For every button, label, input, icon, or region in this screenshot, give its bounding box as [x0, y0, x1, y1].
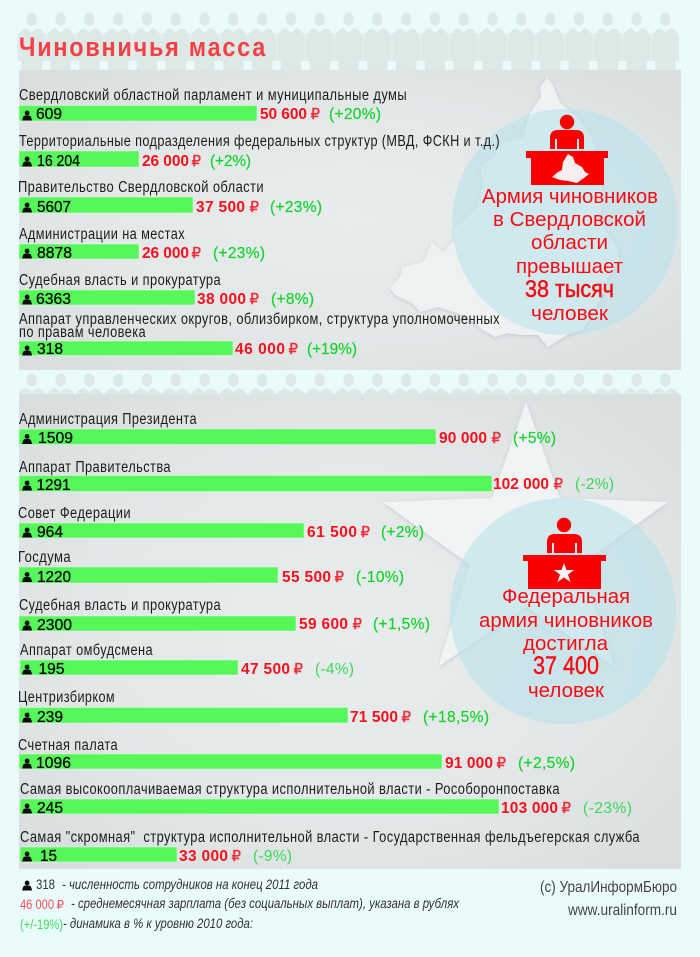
row: regional parliament: Свердловский областной парламент и муниципальные думы: [19, 87, 407, 104]
legend: [20, 876, 460, 932]
row: Accounts Chamber: [18, 737, 575, 772]
row: local administrations: ₽: [191, 244, 201, 262]
row: federal territorial divisions: Территориальные подразделения федеральных структур (МВД, ФСКН и т.д.): [19, 133, 500, 150]
callout text: regional: человек: [531, 303, 608, 325]
row: courts and prosecutors, federal: Судебная власть и прокуратура: [19, 597, 221, 614]
row: ombudsman apparatus: (-4%): [315, 661, 354, 678]
row: regional parliament: (+20%): [329, 106, 381, 123]
circle callout: regional: [452, 109, 678, 335]
row: Accounts Chamber: ₽: [496, 754, 506, 772]
row: Rosoboronpostavka: [20, 781, 632, 817]
row: Government Apparatus: (-2%): [575, 476, 614, 493]
row: Central Election Commission: [18, 689, 489, 726]
row: Central Election Commission: Центризбирком: [18, 689, 115, 706]
row: Government Apparatus: 1291: [36, 477, 70, 494]
callout text: federal: армия чиновников: [479, 610, 653, 632]
row: local administrations: (+23%): [213, 245, 265, 262]
callout text: federal: 37 400: [533, 652, 599, 680]
row: regional parliament: 609: [36, 106, 62, 123]
row: Federation Council: 964: [37, 524, 63, 541]
credits: [540, 879, 677, 919]
row: Rosoboronpostavka: ₽: [561, 799, 571, 817]
row: courts and prosecutors, federal: (+1,5%): [373, 616, 430, 633]
row: Federation Council: ₽: [360, 523, 370, 541]
legend: 46 000: [20, 896, 54, 912]
legend: ₽: [56, 898, 64, 912]
callout text: regional: [482, 186, 658, 325]
row: courts and prosecutors: [19, 272, 314, 308]
row: courts and prosecutors, federal: 59 600: [299, 616, 348, 633]
row: regional government: [18, 179, 322, 216]
row: regional government: 37 500: [196, 199, 245, 216]
row: State Courier Service: 15: [40, 848, 57, 865]
row: State Courier Service: 33 000: [179, 848, 228, 865]
row: courts and prosecutors: ₽: [249, 290, 259, 308]
row: regional parliament: 50 600: [260, 106, 307, 123]
row: Rosoboronpostavka: 245: [37, 800, 63, 817]
row: State Duma: 1220: [37, 569, 71, 586]
row: Central Election Commission: 71 500: [350, 709, 398, 726]
row: courts and prosecutors, federal: [19, 597, 430, 634]
legend: - среднемесячная зарплата (без социальных выплат), указана в рублях: [71, 896, 460, 911]
row: administrative districts apparatus: ₽: [288, 340, 298, 358]
row: Rosoboronpostavka: 103 000: [501, 800, 558, 817]
row: State Duma: (-10%): [356, 569, 404, 586]
row: local administrations: 8878: [37, 245, 72, 262]
row: Presidential Administration: (+5%): [513, 430, 556, 447]
row: ombudsman apparatus: 195: [38, 661, 64, 678]
row: courts and prosecutors: Судебная власть и прокуратура: [19, 272, 221, 289]
row: Presidential Administration: Администрация Президента: [19, 411, 197, 428]
row: federal territorial divisions: 16 204: [37, 153, 80, 170]
map of Sverdlovsk region: [390, 78, 620, 347]
callout text: regional: 38 тысяч: [525, 276, 614, 303]
row: regional parliament: ₽: [310, 105, 320, 123]
legend: 318: [36, 876, 55, 892]
row: federal territorial divisions: ₽: [191, 152, 201, 170]
callout text: federal: человек: [528, 680, 604, 702]
row: courts and prosecutors: 6363: [36, 291, 71, 308]
row: Government Apparatus: [19, 459, 614, 494]
star shape: [383, 402, 668, 667]
legend: (+/-19%): [20, 916, 63, 932]
row: Government Apparatus: ₽: [553, 475, 563, 493]
row: regional government: Правительство Свердловской области: [18, 179, 264, 196]
callout text: regional: превышает: [516, 256, 623, 278]
row: local administrations: Администрации на местах: [19, 226, 185, 243]
callout text: federal: [479, 586, 653, 702]
panel: federal officials: [18, 394, 681, 869]
decorative crowd band: top: [17, 10, 679, 70]
icon: official at desk with star: [523, 518, 606, 589]
row: Rosoboronpostavka: Самая высокооплачиваемая структура исполнительной власти - Рособоронпоставка: [20, 781, 560, 798]
row: ombudsman apparatus: Аппарат омбудсмена: [20, 642, 153, 659]
row: local administrations: 26 000: [142, 245, 189, 262]
callout text: federal: Федеральная: [502, 586, 630, 608]
credits: (с) УралИнформБюро: [540, 879, 677, 896]
row: federal territorial divisions: (+2%): [210, 153, 251, 170]
row: regional parliament: [19, 87, 407, 123]
row: Government Apparatus: 102 000: [493, 476, 549, 493]
callout text: regional: области: [531, 232, 608, 254]
row: Rosoboronpostavka: (-23%): [583, 800, 632, 817]
title: Чиновничья масса: [19, 32, 267, 62]
row: Presidential Administration: ₽: [491, 429, 501, 447]
row: administrative districts apparatus: по правам человека: [19, 324, 146, 341]
row: Federation Council: [18, 505, 424, 541]
row: administrative districts apparatus: Аппарат управленческих округов, облизбирком, структура уполномоченных: [19, 311, 500, 328]
row: local administrations: [19, 226, 265, 262]
row: administrative districts apparatus: (+19%): [307, 341, 357, 358]
row: federal territorial divisions: [19, 133, 500, 170]
legend: - динамика в % к уровню 2010 года:: [63, 916, 253, 931]
row: Federation Council: (+2%): [381, 524, 424, 541]
row: State Duma: [18, 549, 404, 586]
icon: official at desk with region map: [526, 115, 608, 185]
row: Central Election Commission: 239: [37, 709, 63, 726]
row: Accounts Chamber: 91 000: [445, 755, 493, 772]
row: State Duma: ₽: [334, 568, 344, 586]
row: regional government: ₽: [249, 198, 259, 216]
row: administrative districts apparatus: 318: [37, 341, 63, 358]
callout text: federal: достигла: [523, 633, 609, 655]
legend: - численность сотрудников на конец 2011 года: [62, 877, 318, 892]
row: Presidential Administration: [19, 411, 556, 447]
row: federal territorial divisions: 26 000: [142, 153, 189, 170]
row: State Courier Service: (-9%): [253, 848, 292, 865]
decorative crowd band: middle: [17, 372, 679, 394]
callout text: regional: Армия чиновников: [482, 186, 658, 208]
row: ombudsman apparatus: ₽: [293, 660, 303, 678]
row: Accounts Chamber: 1096: [36, 755, 71, 772]
row: Accounts Chamber: Счетная палата: [18, 737, 118, 754]
row: Federation Council: Совет Федерации: [18, 505, 131, 522]
row: Central Election Commission: ₽: [401, 708, 411, 726]
row: regional government: 5607: [37, 199, 71, 216]
row: ombudsman apparatus: [20, 642, 354, 678]
row: Government Apparatus: Аппарат Правительства: [19, 459, 171, 476]
row: administrative districts apparatus: 46 000: [235, 341, 285, 358]
row: courts and prosecutors, federal: 2300: [37, 617, 72, 634]
row: regional government: (+23%): [270, 199, 322, 216]
row: Federation Council: 61 500: [307, 524, 357, 541]
row: State Duma: 55 500: [282, 569, 331, 586]
row: State Courier Service: [20, 829, 640, 865]
row: Accounts Chamber: (+2,5%): [518, 755, 575, 772]
panel: regional officials: [18, 70, 681, 370]
row: courts and prosecutors: (+8%): [271, 291, 314, 308]
row: courts and prosecutors, federal: ₽: [352, 615, 362, 633]
row: State Duma: Госдума: [18, 549, 71, 566]
row: courts and prosecutors: 38 000: [197, 291, 246, 308]
callout text: regional: в Свердловской: [493, 209, 646, 231]
row: Central Election Commission: (+18,5%): [423, 709, 489, 726]
row: ombudsman apparatus: 47 500: [241, 661, 290, 678]
row: State Courier Service: ₽: [231, 847, 241, 865]
row: administrative districts apparatus: [19, 311, 500, 358]
row: Presidential Administration: 1509: [38, 430, 73, 447]
row: Presidential Administration: 90 000: [439, 430, 487, 447]
circle callout: federal: [450, 498, 676, 724]
credits: www.uralinform.ru: [567, 902, 677, 919]
